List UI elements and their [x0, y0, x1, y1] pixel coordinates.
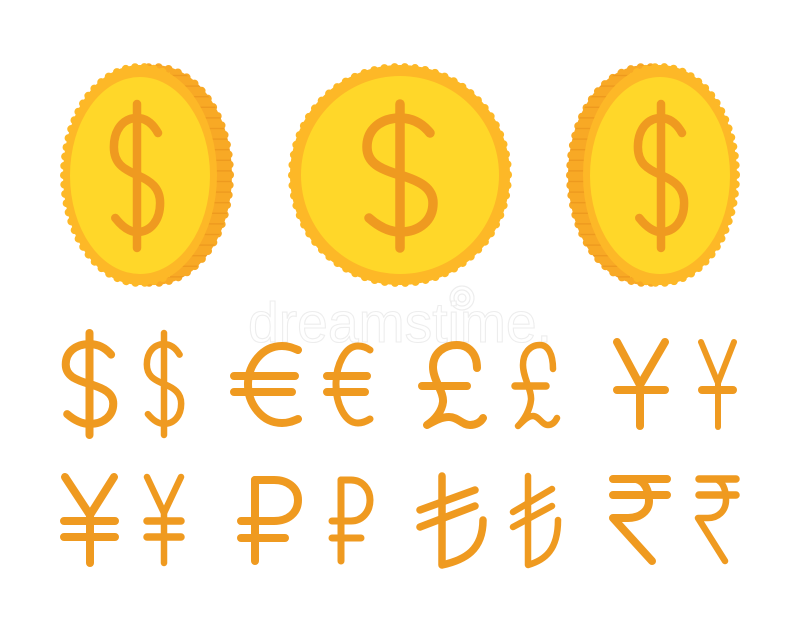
- symbol: ruble narrow: [332, 480, 370, 561]
- coin: rotated left view: [63, 65, 232, 285]
- symbol: euro narrow: [327, 346, 370, 423]
- coin edge with ribs: [76, 65, 232, 285]
- symbol: yuan narrow: [701, 342, 734, 427]
- coin face with scalloped rim: [290, 65, 510, 285]
- infographic canvas: [60, 63, 740, 569]
- symbol: dollar wide: [66, 333, 113, 435]
- dollar sign: [114, 104, 160, 248]
- watermark spiral: [450, 286, 474, 310]
- watermark text: dreamstime.: [248, 291, 552, 355]
- symbol: yen narrow: [147, 477, 181, 563]
- symbol: lira wide: [420, 476, 483, 565]
- symbol: yen wide: [64, 477, 115, 563]
- symbol: yuan wide: [617, 342, 665, 426]
- dollar sign: [367, 104, 433, 248]
- symbol: dollar narrow: [147, 333, 181, 435]
- symbol: rupee wide: [613, 479, 667, 561]
- symbol: lira narrow: [513, 476, 558, 565]
- symbol: pound narrow: [515, 345, 557, 426]
- symbol: pound wide: [422, 345, 483, 425]
- symbol: rupee narrow: [698, 479, 736, 561]
- symbol: ruble wide: [241, 480, 298, 561]
- coin: front view: [290, 65, 510, 285]
- dollar sign: [638, 104, 684, 248]
- coin: rotated right view: [568, 65, 737, 285]
- watermark: [248, 286, 552, 355]
- coin face with scalloped rim: [583, 65, 737, 285]
- symbol: euro wide: [234, 346, 298, 423]
- coin edge with ribs: [568, 65, 724, 285]
- coin face with scalloped rim: [63, 65, 217, 285]
